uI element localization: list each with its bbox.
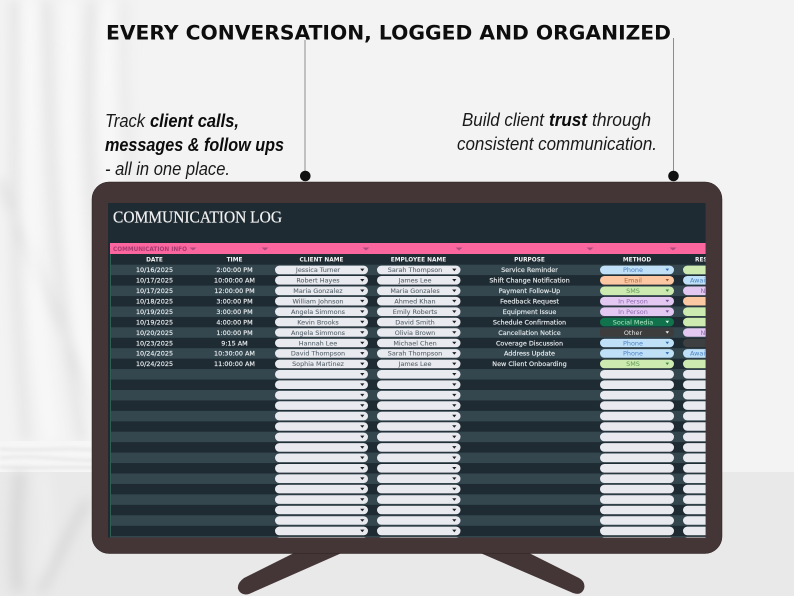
text block: track client calls: messages & follow ups xyxy=(105,135,284,155)
column headers: METHOD xyxy=(623,258,651,264)
column headers: RESULT xyxy=(695,258,719,264)
row 8: Phone xyxy=(623,339,643,347)
text block: track client calls: Track xyxy=(105,111,146,131)
row 3: Payment Follow-Up xyxy=(499,287,560,295)
column headers: TIME xyxy=(227,258,242,264)
row 7: 1:00:00 PM xyxy=(216,329,253,337)
row 1: Sarah Thompson xyxy=(388,266,442,274)
text block: build client trust: Build client xyxy=(462,110,545,130)
column headers: DATE xyxy=(146,258,163,264)
row 8 xyxy=(136,339,723,347)
row 10: SMS xyxy=(626,360,640,368)
row 6: David Smith xyxy=(395,318,435,326)
row 9: Sarah Thompson xyxy=(388,350,442,358)
row 9: David Thompson xyxy=(291,350,345,358)
monitor stand: right leg xyxy=(478,552,584,594)
pink section bar: COMMUNICATION INFO xyxy=(113,246,187,253)
row 4: Feedback Request xyxy=(500,298,559,306)
row 10 xyxy=(136,360,723,368)
row 4: 3:00:00 PM xyxy=(216,298,253,306)
row 1 xyxy=(136,266,723,274)
row 9 xyxy=(136,349,723,358)
row 3: Maria Gonzalez xyxy=(293,287,343,295)
row 2 xyxy=(136,276,723,285)
row 6: Schedule Confirmation xyxy=(493,318,566,326)
monitor frame xyxy=(92,182,722,554)
row 5: Emily Roberts xyxy=(393,308,438,316)
row 10: 11:00:00 AM xyxy=(214,360,255,368)
row 6: Kevin Brooks xyxy=(297,318,339,326)
row 4: William Johnson xyxy=(292,298,344,306)
row 5 xyxy=(136,307,723,316)
callout dot: right xyxy=(668,171,679,181)
row 6: Social Media xyxy=(613,318,653,326)
title: EVERY CONVERSATION, LOGGED AND ORGANIZED xyxy=(106,22,671,44)
text block: build client trust: consistent communication. xyxy=(457,134,657,154)
row 4: In Person xyxy=(618,298,648,306)
row 7 xyxy=(136,328,723,337)
row 10: Sophia Martinez xyxy=(292,360,345,368)
row 8: Michael Chen xyxy=(393,339,437,347)
row 5: Angela Simmons xyxy=(291,308,346,316)
blank dropdown rows xyxy=(275,370,723,546)
row 7: Other xyxy=(624,329,642,337)
row 7: Cancellation Notice xyxy=(498,329,561,337)
row 3 xyxy=(136,286,723,295)
monitor stand: left leg xyxy=(238,552,344,594)
row 8: 10/23/2025 xyxy=(136,339,173,347)
row 5: 3:00:00 PM xyxy=(216,308,253,316)
row 2: Robert Hayes xyxy=(296,277,340,285)
row 3: Maria Gonzales xyxy=(390,287,440,295)
row 4: Ahmed Khan xyxy=(394,298,436,306)
sheet title: COMMUNICATION LOG xyxy=(113,208,282,227)
row 10: New Client Onboarding xyxy=(492,360,567,368)
row 1: Phone xyxy=(623,266,643,274)
row 6: 10/19/2025 xyxy=(136,318,173,326)
row 8: Coverage Discussion xyxy=(496,339,563,347)
row 1: Jessica Turner xyxy=(295,266,340,274)
row 6 xyxy=(136,318,723,326)
row 7: Angela Simmons xyxy=(291,329,346,337)
row 2: Shift Change Notification xyxy=(489,277,570,285)
callout line: right xyxy=(672,38,674,176)
row 9: 10:30:00 AM xyxy=(214,350,255,358)
row 8: Hannah Lee xyxy=(299,339,337,347)
row 4 xyxy=(136,297,723,306)
row 5: In Person xyxy=(618,308,648,316)
row 9: Awaiting xyxy=(690,350,718,358)
spreadsheet screen xyxy=(108,203,723,546)
row 10: 10/24/2025 xyxy=(136,360,173,368)
row backgrounds xyxy=(110,254,706,538)
text block: track client calls: client calls, xyxy=(150,111,239,131)
column headers xyxy=(146,257,706,262)
column headers: EMPLOYEE NAME xyxy=(391,258,446,264)
row 3: 12:00:00 PM xyxy=(214,287,255,295)
row 7: 10/20/2025 xyxy=(136,329,173,337)
row 10: James Lee xyxy=(398,360,431,368)
text block: track client calls xyxy=(105,111,284,179)
text block: build client trust: through xyxy=(592,110,651,130)
text block: build client trust xyxy=(457,110,657,154)
row 5: Equipment Issue xyxy=(503,308,556,316)
row 7: Olivia Brown xyxy=(395,329,435,337)
row 8: 9:15 AM xyxy=(221,339,248,347)
row 2: 10/17/2025 xyxy=(136,277,173,285)
text block: build client trust: trust xyxy=(549,110,588,130)
row 9: Address Update xyxy=(504,350,555,358)
row 2: Email xyxy=(624,277,642,285)
row 2: Awaiting xyxy=(690,277,718,285)
row 3: No xyxy=(700,287,709,295)
row 2: James Lee xyxy=(398,277,431,285)
row 4: 10/18/2025 xyxy=(136,298,173,306)
callout dot: left xyxy=(300,171,311,181)
row 1: 10/16/2025 xyxy=(136,266,173,274)
text block: track client calls: - all in one place. xyxy=(105,159,230,179)
row 5: 10/19/2025 xyxy=(136,308,173,316)
row 3: 10/17/2025 xyxy=(136,287,173,295)
row 1: Service Reminder xyxy=(501,266,558,274)
row 3: SMS xyxy=(626,287,640,295)
column headers: CLIENT NAME xyxy=(300,258,344,264)
column headers: PURPOSE xyxy=(514,258,545,264)
row 2: 10:00:00 AM xyxy=(214,277,255,285)
row 7: No xyxy=(700,329,709,337)
row 1: 2:00:00 PM xyxy=(216,266,253,274)
callout line: left xyxy=(304,40,306,176)
row 6: 4:00:00 PM xyxy=(216,318,253,326)
row 9: Phone xyxy=(623,350,643,358)
pink section bar xyxy=(110,243,706,254)
row 9: 10/24/2025 xyxy=(136,350,173,358)
